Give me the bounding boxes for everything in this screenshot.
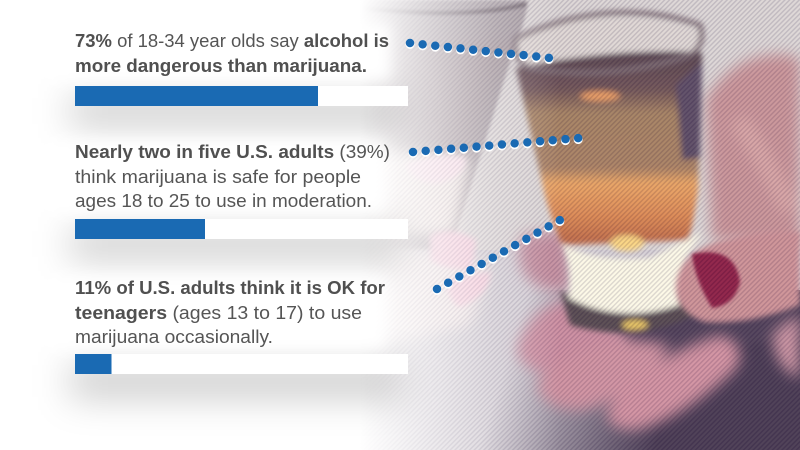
- bar: 73%: [75, 86, 408, 106]
- nail: upper: [405, 155, 466, 183]
- bar: 39%: [75, 219, 408, 239]
- glass empty top: [515, 17, 702, 85]
- text: stat 2: [75, 141, 390, 211]
- nail: middle: [430, 231, 476, 270]
- dark right wall: [676, 62, 702, 160]
- dotted leader line 1: [410, 43, 550, 60]
- nail: lower: [447, 272, 490, 307]
- main shot glass: [515, 13, 702, 333]
- stat 2: [75, 141, 408, 239]
- rim: [515, 13, 702, 73]
- text: stat 3: marijuana occasionally.: [75, 326, 273, 347]
- dark band under the thumb: [610, 295, 800, 365]
- soft shadows behind bars: [70, 96, 400, 398]
- bar: 11%: [75, 354, 408, 374]
- glass base dark ring: [560, 290, 700, 333]
- text: stat 3: 11% of U.S. adults think it is OK for: [75, 277, 385, 298]
- bright base: [562, 232, 702, 314]
- dark lower right shadow: [480, 290, 800, 450]
- thumb with red nail: [676, 231, 800, 322]
- right hand: [706, 55, 800, 245]
- dotted leader line 3: [437, 220, 560, 290]
- text: stat 1: [75, 30, 389, 76]
- text: stat 1: more dangerous than marijuana.: [75, 55, 367, 76]
- striped overlay: [330, 0, 800, 450]
- dotted leader line 2: [413, 138, 579, 154]
- table surface: [330, 250, 800, 450]
- left background glass: [330, 0, 528, 250]
- liquid: [516, 51, 702, 245]
- left hand and nails: [330, 40, 520, 355]
- amber glints: [610, 235, 644, 251]
- white halo behind text: [40, 24, 390, 348]
- text: stat 2: Nearly two in five U.S. adults (39%): [75, 141, 390, 162]
- text: stat 3: [75, 277, 385, 347]
- stat 3: [75, 277, 408, 374]
- text: stat 2: think marijuana is safe for people: [75, 166, 361, 187]
- text: stat 3: teenagers (ages 13 to 17) to use: [75, 302, 362, 323]
- fingers below the glass: [516, 230, 800, 430]
- stat 1: [75, 30, 408, 106]
- text: stat 1: 73% of 18-34 year olds say alcohol is: [75, 30, 389, 51]
- text: stat 2: ages 18 to 25 to use in moderation.: [75, 190, 372, 211]
